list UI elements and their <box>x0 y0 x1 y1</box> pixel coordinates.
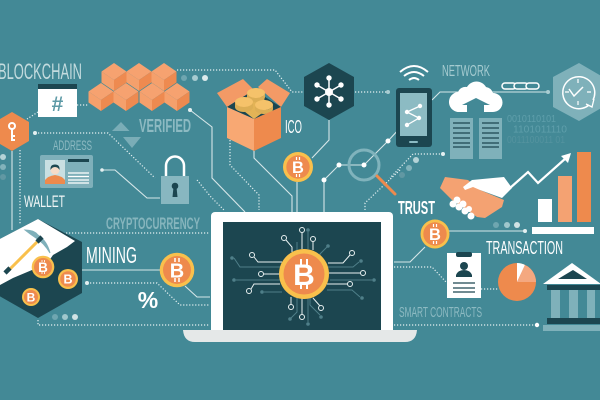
icon: handshake <box>440 177 512 220</box>
connector lines <box>12 70 550 327</box>
verified arrows <box>112 122 141 148</box>
icon: hash window <box>38 84 77 117</box>
binary code: 0011100011 01 <box>507 135 565 146</box>
icon: id card <box>40 155 93 188</box>
dots: network <box>399 157 419 178</box>
icon: network hexagon <box>304 63 354 120</box>
label: percent: % <box>138 287 158 313</box>
icon: chain <box>502 83 539 89</box>
coin: mining: B <box>170 260 184 282</box>
icon: key hexagon <box>0 112 29 151</box>
label: trust: TRUST <box>398 198 435 218</box>
icon: clock hexagon <box>553 63 600 121</box>
label: address: ADDRESS <box>53 137 92 153</box>
dots: trust <box>493 222 520 228</box>
label: ico: ICO <box>285 117 302 137</box>
circuit traces <box>230 228 376 326</box>
icon: wifi <box>400 66 428 80</box>
dots: key <box>0 154 6 180</box>
icon: bank <box>543 263 600 331</box>
dots: blockchain <box>181 75 208 81</box>
label: cryptocurrency: CRYPTOCURRENCY <box>106 215 200 233</box>
coin: trust: B <box>429 226 441 244</box>
icon: magnifier <box>322 138 395 194</box>
icon: mining hexagon: B <box>27 290 36 304</box>
chart: growth arrow and bars <box>510 152 594 234</box>
coin: ico: B <box>292 159 304 177</box>
icon: mining hexagon <box>0 219 82 318</box>
icon: mining hexagon: B <box>63 272 73 286</box>
icon: ico box <box>217 79 290 151</box>
title: blockchain: BLOCKCHAIN <box>0 59 82 84</box>
label: mining: MINING <box>86 242 137 268</box>
binary code: 0010110101 <box>507 114 556 125</box>
chart: pie <box>498 263 536 301</box>
coin: ico <box>283 152 313 182</box>
label: network: NETWORK <box>442 63 490 80</box>
label: wallet: WALLET <box>24 193 65 211</box>
coin: mining <box>160 253 194 287</box>
icon: mining hexagon: B <box>38 260 48 275</box>
icon: block cubes <box>88 63 190 111</box>
icon: hash window: # <box>52 93 64 116</box>
icon: servers <box>450 118 502 159</box>
icon: phone <box>396 88 432 147</box>
dots: mining <box>52 314 78 320</box>
icon: padlock <box>161 156 189 204</box>
binary code <box>507 114 567 146</box>
icon: cloud upload <box>449 82 502 112</box>
laptop <box>183 212 417 342</box>
label: verified: VERIFIED <box>139 116 191 136</box>
coin: laptop <box>279 249 329 299</box>
coin: trust <box>420 220 450 248</box>
label: smart contracts: SMART CONTRACTS <box>399 304 482 321</box>
binary code: 1101011110 <box>513 124 567 136</box>
coin: laptop: B <box>293 259 315 292</box>
icon: contract document <box>447 252 481 298</box>
